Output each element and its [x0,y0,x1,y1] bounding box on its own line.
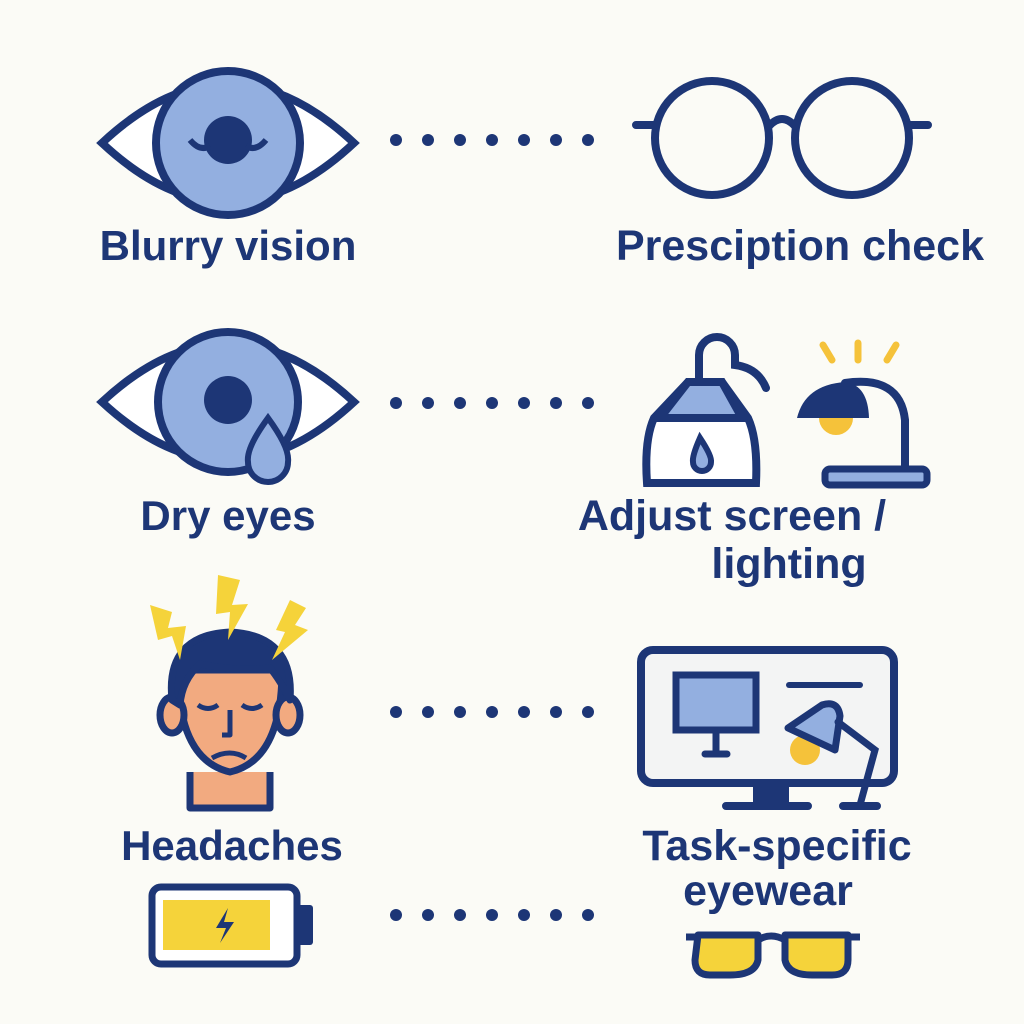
icon: monitor with lamp [641,650,894,806]
icon: blurry eye [102,71,354,215]
label: Task-specific eyewear: eyewear [683,867,853,915]
icon: desk lamp [797,343,927,485]
icon: humidifier [646,337,766,483]
label: Adjust screen / lighting: Adjust screen / [578,492,886,540]
icon: dry eye [102,332,354,482]
icon: glasses [636,81,928,195]
label: Presciption check: Presciption check [616,222,984,270]
label: Task-specific eyewear [642,822,912,915]
dots row 3 [390,706,594,718]
icon: yellow glasses [686,935,860,975]
label: Adjust screen / lighting [578,492,886,588]
label: Dry eyes: Dry eyes [140,492,316,539]
icon: headache person [160,632,300,808]
label: Blurry vision: Blurry vision [100,222,356,269]
dots row 1 [390,134,594,146]
label: Task-specific eyewear: Task-specific [642,822,912,870]
label: Headaches: Headaches [121,822,343,869]
dots row 2 [390,397,594,409]
icon: battery [152,887,313,964]
icon: lightning bolts [150,575,308,660]
dots row 4 [390,909,594,921]
label: Adjust screen / lighting: lighting [711,540,867,588]
